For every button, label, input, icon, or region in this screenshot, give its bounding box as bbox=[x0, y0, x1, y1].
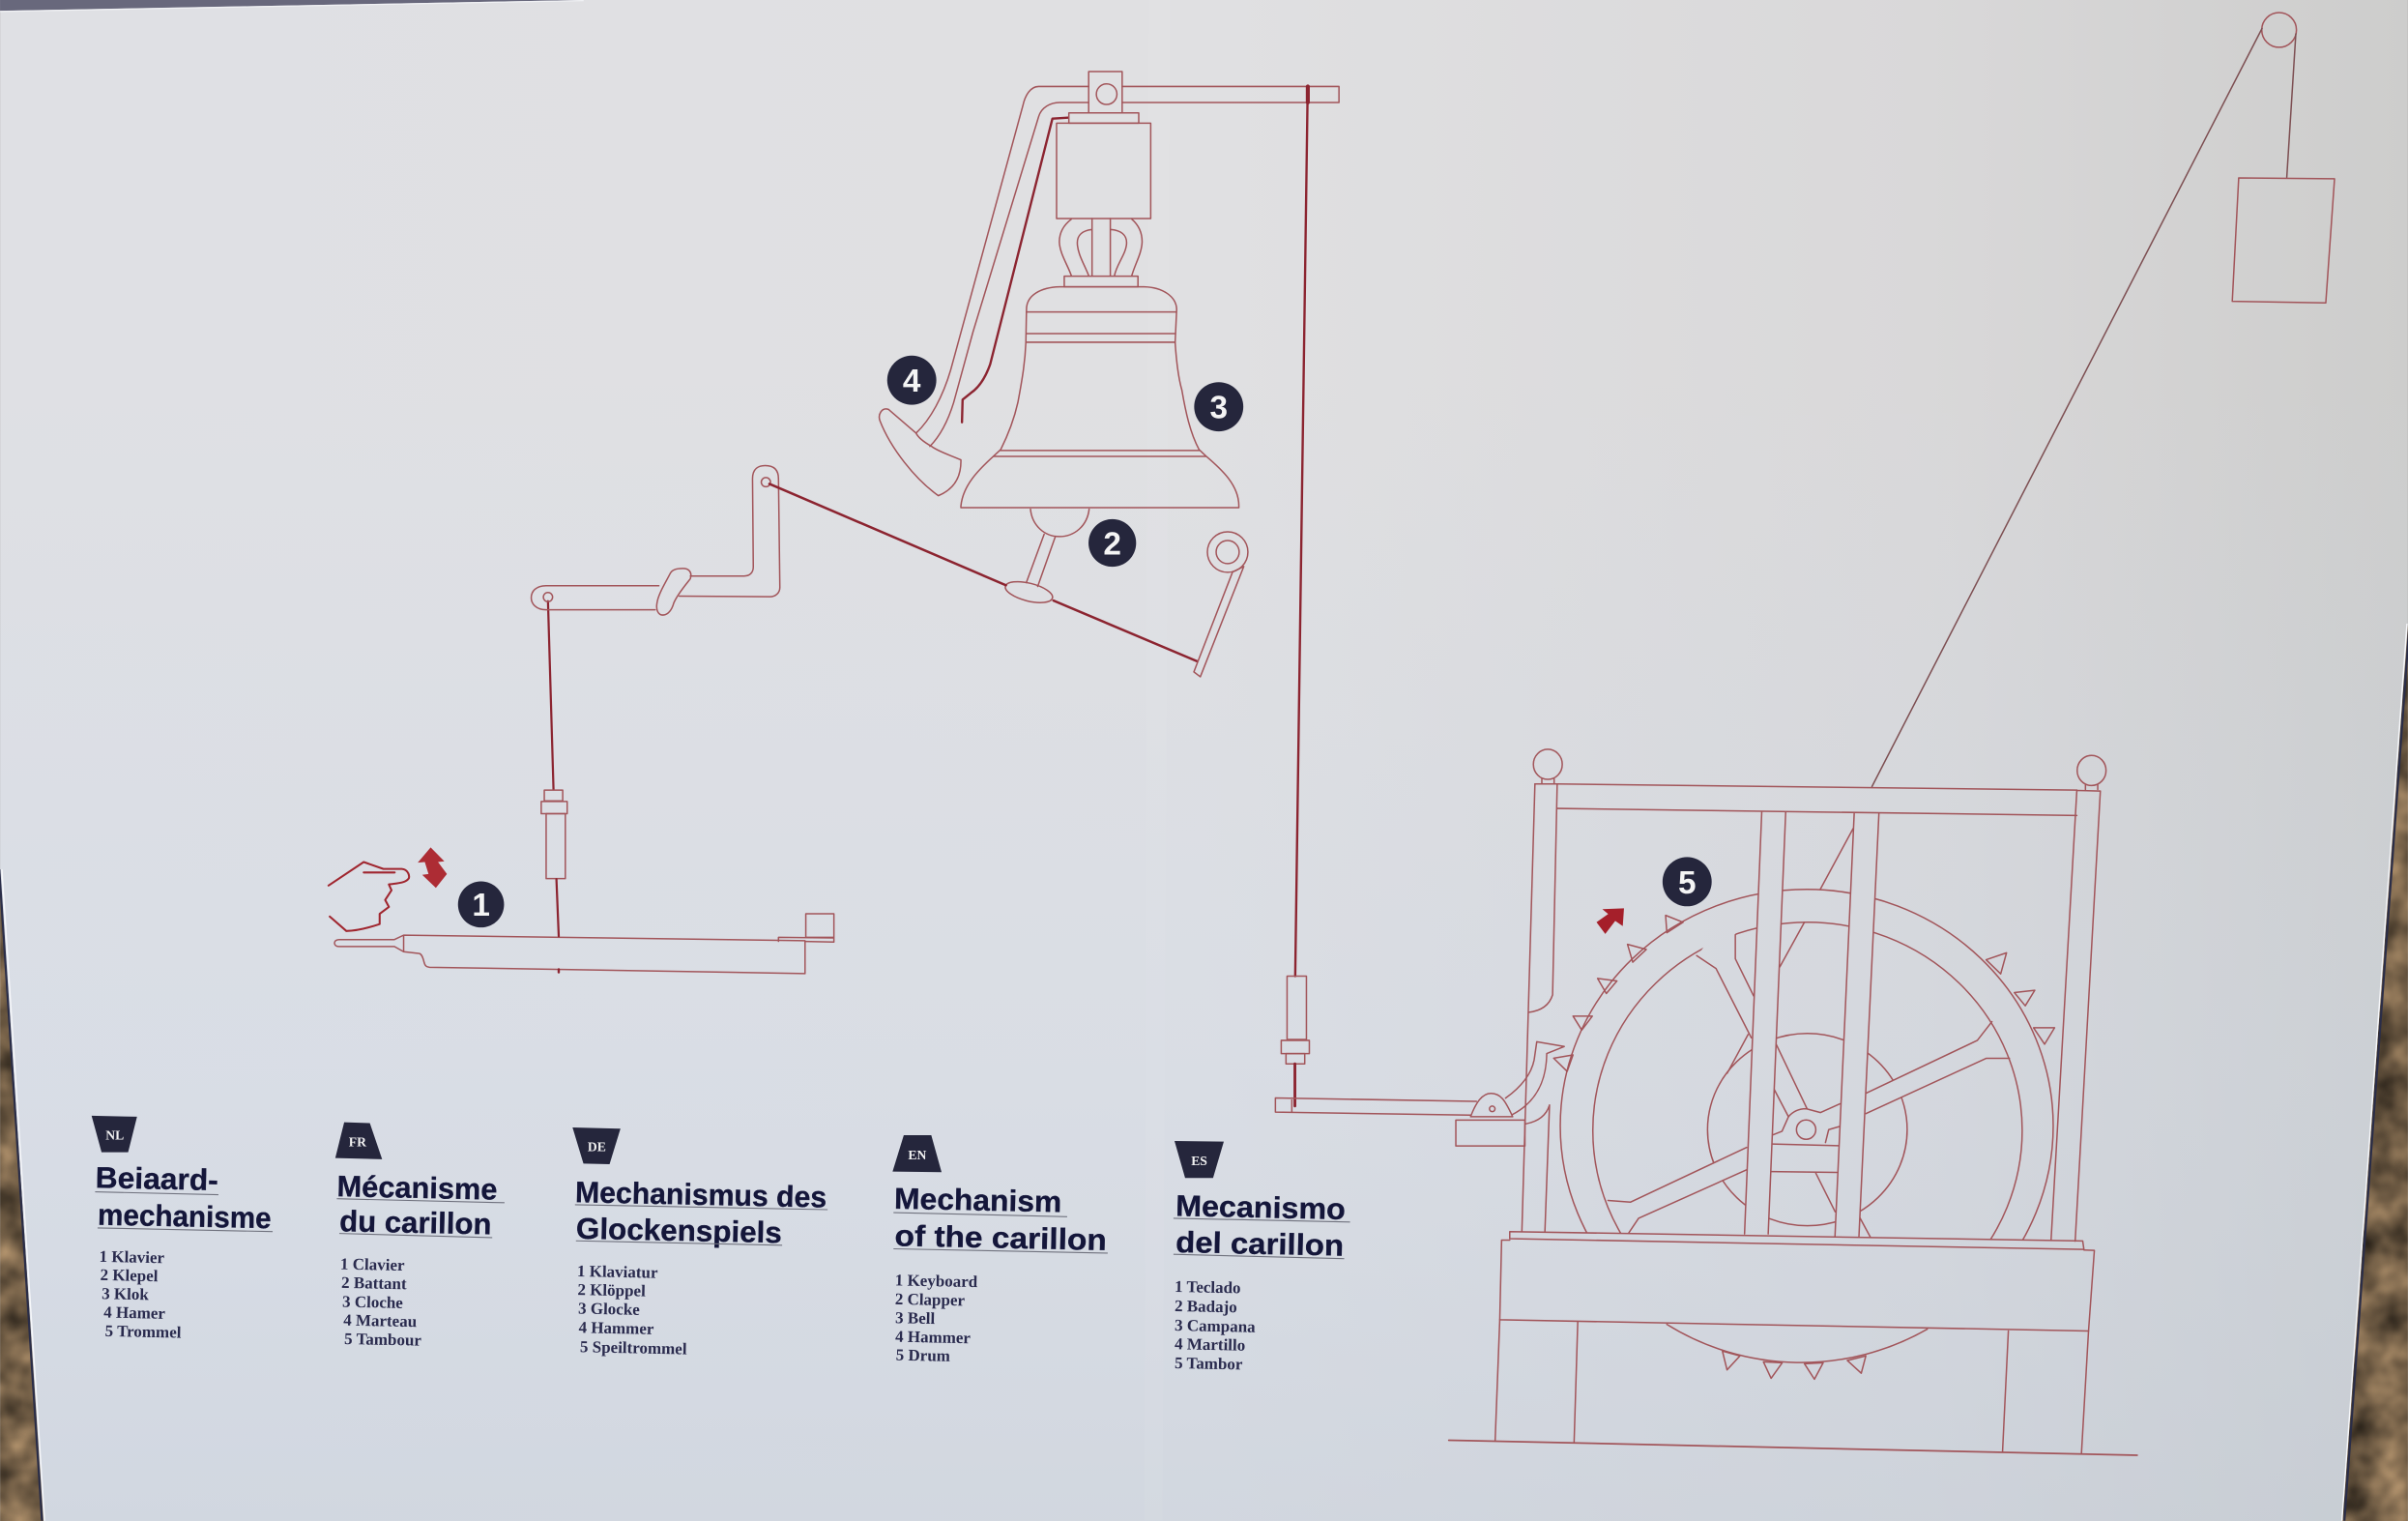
parts list: 1 Teclado bbox=[1175, 1277, 1241, 1297]
number badge 1 bbox=[458, 882, 504, 927]
keyboard key bbox=[334, 914, 834, 974]
language tag EN: EN bbox=[908, 1148, 927, 1162]
number badge 3: 3 bbox=[1209, 391, 1228, 426]
parts list: 5 Tambor bbox=[1175, 1354, 1243, 1373]
heading bbox=[336, 1169, 505, 1242]
parts list: 4 Martillo bbox=[1175, 1334, 1245, 1355]
ground line bbox=[1449, 1440, 2137, 1455]
hammer arm bbox=[916, 86, 1339, 447]
lever pivot bbox=[1470, 1094, 1513, 1117]
legend: Dutch bbox=[92, 1116, 273, 1342]
weight bbox=[2232, 178, 2335, 303]
top rod bbox=[1281, 86, 1309, 1106]
heading: del carillon bbox=[1175, 1225, 1344, 1263]
parts list: 4 Hammer bbox=[578, 1318, 654, 1338]
heading: du carillon bbox=[339, 1204, 492, 1242]
bell crown bbox=[1059, 219, 1142, 276]
heading: Glockenspiels bbox=[576, 1212, 782, 1249]
language tag ES: ES bbox=[1191, 1154, 1207, 1168]
language tag ES bbox=[1175, 1141, 1224, 1178]
drum lever bbox=[1275, 1041, 1564, 1146]
number badge 5: 5 bbox=[1678, 865, 1697, 901]
parts list: 2 Klepel bbox=[100, 1266, 159, 1285]
heading: Beiaard- bbox=[95, 1160, 218, 1197]
number badge 4 bbox=[887, 356, 937, 405]
parts list: 5 Drum bbox=[896, 1346, 950, 1365]
clapper bbox=[769, 483, 1248, 677]
parts list: 3 Cloche bbox=[342, 1293, 403, 1312]
parts list bbox=[1175, 1277, 1256, 1373]
keyboard wire and coupling bbox=[541, 601, 567, 936]
parts list: 2 Klöppel bbox=[577, 1280, 646, 1301]
number badge 2: 2 bbox=[1103, 526, 1121, 562]
legend: English bbox=[892, 1135, 1108, 1365]
parts list: 5 Tambour bbox=[344, 1330, 422, 1350]
language tag DE bbox=[572, 1127, 621, 1164]
heading bbox=[1174, 1188, 1350, 1263]
number badge 2 bbox=[1088, 519, 1136, 567]
icon: pressing hand bbox=[329, 863, 409, 931]
parts list: 4 Hamer bbox=[103, 1303, 166, 1323]
parts list: 3 Campana bbox=[1175, 1316, 1256, 1336]
number badge 4: 4 bbox=[903, 364, 921, 399]
parts list: 2 Badajo bbox=[1175, 1297, 1237, 1316]
number badge 1: 1 bbox=[472, 888, 490, 923]
parts list: 2 Clapper bbox=[895, 1290, 966, 1309]
language tag DE: DE bbox=[588, 1139, 606, 1154]
parts list bbox=[577, 1262, 687, 1359]
parts list: 4 Marteau bbox=[343, 1311, 417, 1331]
heading: Mécanisme bbox=[336, 1169, 498, 1207]
clapper return spring bbox=[1207, 532, 1248, 572]
post ball left bbox=[1533, 749, 1562, 779]
heading bbox=[575, 1175, 827, 1249]
language tag FR: FR bbox=[349, 1134, 366, 1149]
language tag FR bbox=[335, 1123, 382, 1159]
parts list: 2 Battant bbox=[341, 1273, 407, 1293]
parts list bbox=[99, 1247, 182, 1342]
lower wheel arc bbox=[1667, 1325, 1928, 1362]
legend: Spanish bbox=[1174, 1141, 1350, 1373]
parts list: 3 Glocke bbox=[578, 1300, 640, 1319]
clapper rod bbox=[769, 483, 1197, 661]
wheel spokes bbox=[1701, 934, 1902, 1180]
language tag NL: NL bbox=[105, 1128, 124, 1143]
heading bbox=[893, 1182, 1108, 1257]
parts list: 3 Klok bbox=[102, 1284, 150, 1303]
language tag EN bbox=[892, 1135, 942, 1172]
weight and pulley bbox=[1872, 13, 2335, 786]
frame base bbox=[1449, 1232, 2137, 1455]
icon: up-down arrow bbox=[418, 847, 447, 888]
parts list: 5 Trommel bbox=[104, 1322, 182, 1342]
bell hanger bracket bbox=[1057, 72, 1150, 219]
bell body bbox=[961, 287, 1239, 508]
parts list: 3 Bell bbox=[895, 1308, 936, 1328]
parts list: 5 Speiltrommel bbox=[580, 1337, 687, 1359]
heading: mechanisme bbox=[98, 1198, 272, 1235]
heading: Mechanismus des bbox=[575, 1175, 827, 1214]
icon: red arrow near drum bbox=[1597, 908, 1624, 934]
bell assembly bbox=[880, 72, 1339, 508]
parts list: 1 Klaviatur bbox=[577, 1262, 658, 1282]
drum frame posts bbox=[1522, 749, 2106, 1242]
wheel vertical bars bbox=[1745, 812, 1879, 1236]
crank lever bbox=[532, 465, 780, 615]
weight rope inside frame bbox=[1780, 829, 1853, 967]
parts list: 1 Keyboard bbox=[895, 1271, 978, 1291]
parts list bbox=[895, 1271, 978, 1365]
parts list: 4 Hammer bbox=[895, 1328, 972, 1347]
heading: of the carillon bbox=[894, 1218, 1107, 1257]
number badge 3 bbox=[1194, 382, 1243, 431]
parts list bbox=[340, 1255, 422, 1350]
post ball right bbox=[2077, 755, 2106, 785]
hammer wire bbox=[962, 118, 1068, 423]
parts list: 1 Klavier bbox=[99, 1247, 165, 1267]
top beam bbox=[1557, 784, 2076, 815]
wheel teeth bbox=[1553, 916, 2054, 1071]
heading bbox=[95, 1160, 273, 1235]
heading: Mechanism bbox=[894, 1182, 1062, 1219]
number badge 5 bbox=[1663, 857, 1712, 906]
crank joint bbox=[656, 569, 691, 615]
drum wheel bbox=[1553, 812, 2054, 1379]
language tag NL bbox=[92, 1116, 137, 1153]
heading: Mecanismo bbox=[1175, 1188, 1346, 1226]
rod coupling bbox=[1287, 977, 1306, 1039]
icon: hammer head bbox=[880, 409, 961, 496]
parts list: 1 Clavier bbox=[340, 1255, 405, 1274]
legend: French bbox=[335, 1123, 505, 1350]
legend: German bbox=[572, 1127, 827, 1359]
